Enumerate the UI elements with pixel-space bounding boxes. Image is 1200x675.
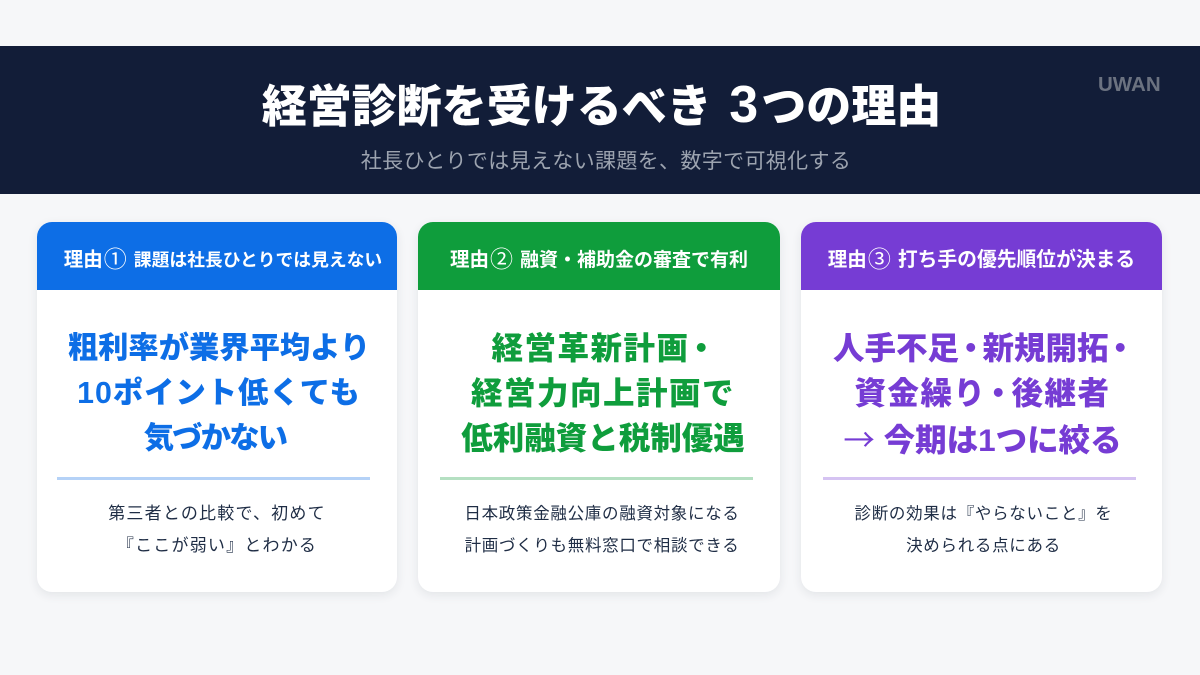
panel: reason 2 [418, 222, 780, 592]
description: reason 2 [464, 504, 740, 555]
panel heading: reason 1: ① [104, 240, 127, 274]
panel heading: reason 3: ③ [868, 240, 891, 274]
key message: reason 1: 気づかない [144, 422, 286, 455]
description: reason 1: 第三者との比較で、初めて [108, 504, 326, 523]
description: reason 2: 日本政策金融公庫の融資対象になる [464, 505, 740, 523]
description: reason 3: 診断の効果は『やらないこと』を [854, 505, 1112, 523]
panel heading: reason 2 [418, 222, 780, 290]
key message: reason 3: 人手不足・新規開拓・ [833, 330, 1136, 366]
key message: reason 1: 粗利率が業界平均より [68, 332, 370, 365]
key message: reason 2: 経営革新計画・ [491, 330, 719, 366]
key message: reason 3: → 今期は1つに絞る [843, 415, 1122, 461]
title: 経営診断を受けるべき 3つの理由 [262, 76, 941, 134]
header band [0, 46, 1200, 194]
brand label: UWAN [1098, 73, 1161, 96]
panel heading: reason 3 [801, 222, 1162, 290]
description: reason 1: 『ここが弱い』とわかる [117, 536, 317, 555]
panel: reason 3 [801, 222, 1162, 592]
panel heading: reason 2: ② [490, 240, 513, 274]
key message: reason 2: 低利融資と税制優遇 [461, 420, 745, 456]
key message: reason 1: 10ポイント低くても [77, 377, 361, 410]
panel: reason 1 [37, 222, 397, 592]
panel heading: reason 1 [37, 222, 397, 290]
key message: reason 1 [68, 331, 370, 455]
panel heading: reason 1: 理由 課題は社長ひとりでは見えない [64, 243, 382, 272]
panel heading: reason 2: 理由 融資・補助金の審査で有利 [450, 243, 748, 272]
description: reason 2: 計画づくりも無料窓口で相談できる [465, 537, 739, 555]
panel heading: reason 3: 理由 打ち手の優先順位が決まる [828, 243, 1135, 272]
description: reason 1 [108, 504, 326, 555]
key message: reason 2: 経営力向上計画で [471, 375, 735, 411]
description: reason 3: 決められる点にある [906, 537, 1061, 555]
key message: reason 3 [833, 330, 1136, 461]
key message: reason 3: 資金繰り・後継者 [854, 375, 1111, 411]
key message: reason 2 [461, 330, 745, 456]
subtitle: 社長ひとりでは見えない課題を、数字で可視化する [361, 150, 851, 173]
description: reason 3 [854, 505, 1112, 555]
